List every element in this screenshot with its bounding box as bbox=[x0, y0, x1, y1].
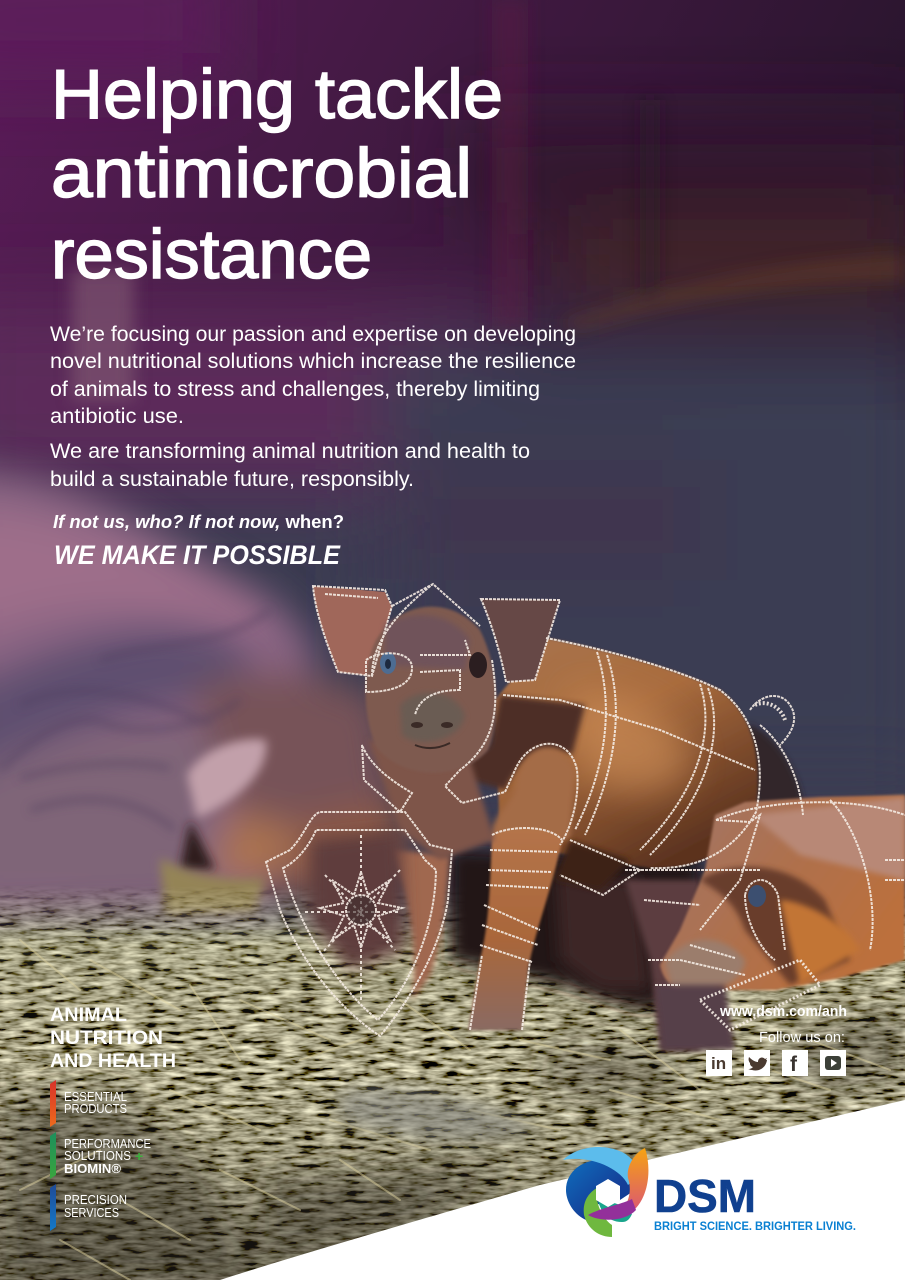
rear legs bbox=[555, 870, 650, 990]
blurred sow on the left bbox=[0, 470, 400, 920]
straw ground bbox=[0, 860, 905, 1280]
behind leg under shield bbox=[310, 830, 405, 970]
orange streaks in wall bbox=[72, 0, 905, 400]
icon: facebook: f bbox=[790, 1053, 798, 1076]
dark soil patches bbox=[0, 1010, 905, 1280]
icon: linkedin: in bbox=[711, 1054, 726, 1073]
logo symbol bbox=[563, 1147, 648, 1237]
precision services bbox=[50, 1184, 127, 1231]
animal nutrition and health heading: NUTRITION bbox=[50, 1027, 163, 1049]
neck bbox=[368, 740, 495, 860]
white corner panel bbox=[220, 1100, 905, 1280]
essential products: PRODUCTS bbox=[64, 1102, 127, 1116]
blurred sow skin folds bbox=[0, 610, 270, 830]
animal nutrition and health heading: AND HEALTH bbox=[50, 1050, 176, 1072]
second paragraph: build a sustainable future, responsibly. bbox=[50, 467, 414, 491]
forehead bbox=[385, 615, 470, 670]
second piglet outlines bbox=[644, 800, 905, 1030]
eyes and nostrils bbox=[380, 652, 487, 748]
performance solutions biomin: + bbox=[135, 1148, 143, 1164]
grey dirt patch bbox=[340, 1088, 540, 1141]
second piglet cheek bbox=[700, 867, 850, 985]
second piglet eye bbox=[748, 885, 766, 907]
body harness lines bbox=[503, 638, 760, 895]
intro paragraph bbox=[50, 322, 576, 428]
ear outlines bbox=[313, 586, 560, 682]
logo wordmark: DSM bbox=[654, 1170, 756, 1222]
we make it possible: WE MAKE IT POSSIBLE bbox=[54, 540, 341, 570]
DSM logo bbox=[563, 1147, 856, 1237]
intro paragraph: of animals to stress and challenges, thereby limiting bbox=[50, 377, 540, 401]
icon: twitter bbox=[744, 1050, 770, 1076]
leg bands bbox=[470, 828, 562, 1030]
logo tagline: BRIGHT SCIENCE. BRIGHTER LIVING. bbox=[654, 1219, 856, 1233]
nearby post bbox=[655, 985, 735, 1050]
blurred piglet ear and snout bbox=[160, 739, 266, 915]
pig body bbox=[495, 638, 758, 868]
social icons bbox=[706, 1050, 846, 1076]
intro paragraph: novel nutritional solutions which increase the resilience bbox=[50, 349, 576, 373]
second paragraph bbox=[50, 439, 530, 491]
essential products: ESSENTIAL bbox=[64, 1090, 127, 1104]
website: www.dsm.com/anh bbox=[719, 1003, 847, 1020]
front leg bbox=[468, 828, 562, 1030]
second piglet top patch bbox=[752, 797, 905, 880]
right ear bbox=[481, 599, 560, 682]
belly shadow bbox=[555, 840, 630, 890]
precision services: PRECISION bbox=[64, 1193, 127, 1207]
shoulder bbox=[490, 747, 575, 840]
follow us label: Follow us on: bbox=[759, 1030, 845, 1046]
second piglet snout bbox=[665, 940, 745, 993]
second piglet bbox=[660, 795, 905, 994]
icon: youtube bbox=[820, 1050, 846, 1076]
precision services: SERVICES bbox=[64, 1206, 119, 1220]
blurred barn wall bbox=[0, 0, 905, 790]
intro paragraph: antibiotic use. bbox=[50, 404, 184, 428]
essential products bbox=[50, 1080, 127, 1127]
head outlines bbox=[362, 584, 578, 845]
shield bbox=[266, 812, 452, 1036]
tail gear bbox=[750, 696, 803, 815]
head bbox=[365, 607, 496, 773]
chest dark bbox=[450, 695, 585, 790]
straw stalks bbox=[20, 940, 890, 1280]
performance solutions biomin: SOLUTIONS bbox=[64, 1149, 131, 1163]
performance solutions biomin: BIOMIN® bbox=[64, 1162, 122, 1176]
left ear bbox=[313, 586, 392, 676]
main piglet and second piglet bbox=[310, 586, 905, 1050]
body highlight bbox=[570, 690, 690, 792]
purple upper tint bbox=[0, 0, 905, 420]
performance solutions biomin bbox=[50, 1132, 151, 1179]
far body haunch bbox=[749, 724, 803, 830]
business list bbox=[50, 1080, 151, 1231]
animal nutrition and health heading bbox=[50, 1004, 176, 1072]
second piglet orange face bbox=[780, 900, 860, 985]
near shield leg bbox=[392, 850, 450, 1000]
shield star bbox=[320, 872, 402, 948]
title: antimicrobial bbox=[51, 134, 472, 212]
snout bbox=[400, 693, 465, 742]
title: resistance bbox=[51, 215, 372, 293]
dark space under belly bbox=[450, 850, 700, 1010]
technical line drawing overlay bbox=[266, 584, 905, 1036]
animal nutrition and health heading: ANIMAL bbox=[50, 1004, 127, 1026]
title bbox=[51, 55, 503, 293]
second paragraph: We are transforming animal nutrition and health to bbox=[50, 439, 530, 463]
intro paragraph: We’re focusing our passion and expertise on developing bbox=[50, 322, 576, 346]
tagline question: If not us, who? If not now, when? bbox=[53, 512, 344, 532]
performance solutions biomin: PERFORMANCE bbox=[64, 1137, 151, 1151]
title: Helping tackle bbox=[51, 55, 503, 133]
